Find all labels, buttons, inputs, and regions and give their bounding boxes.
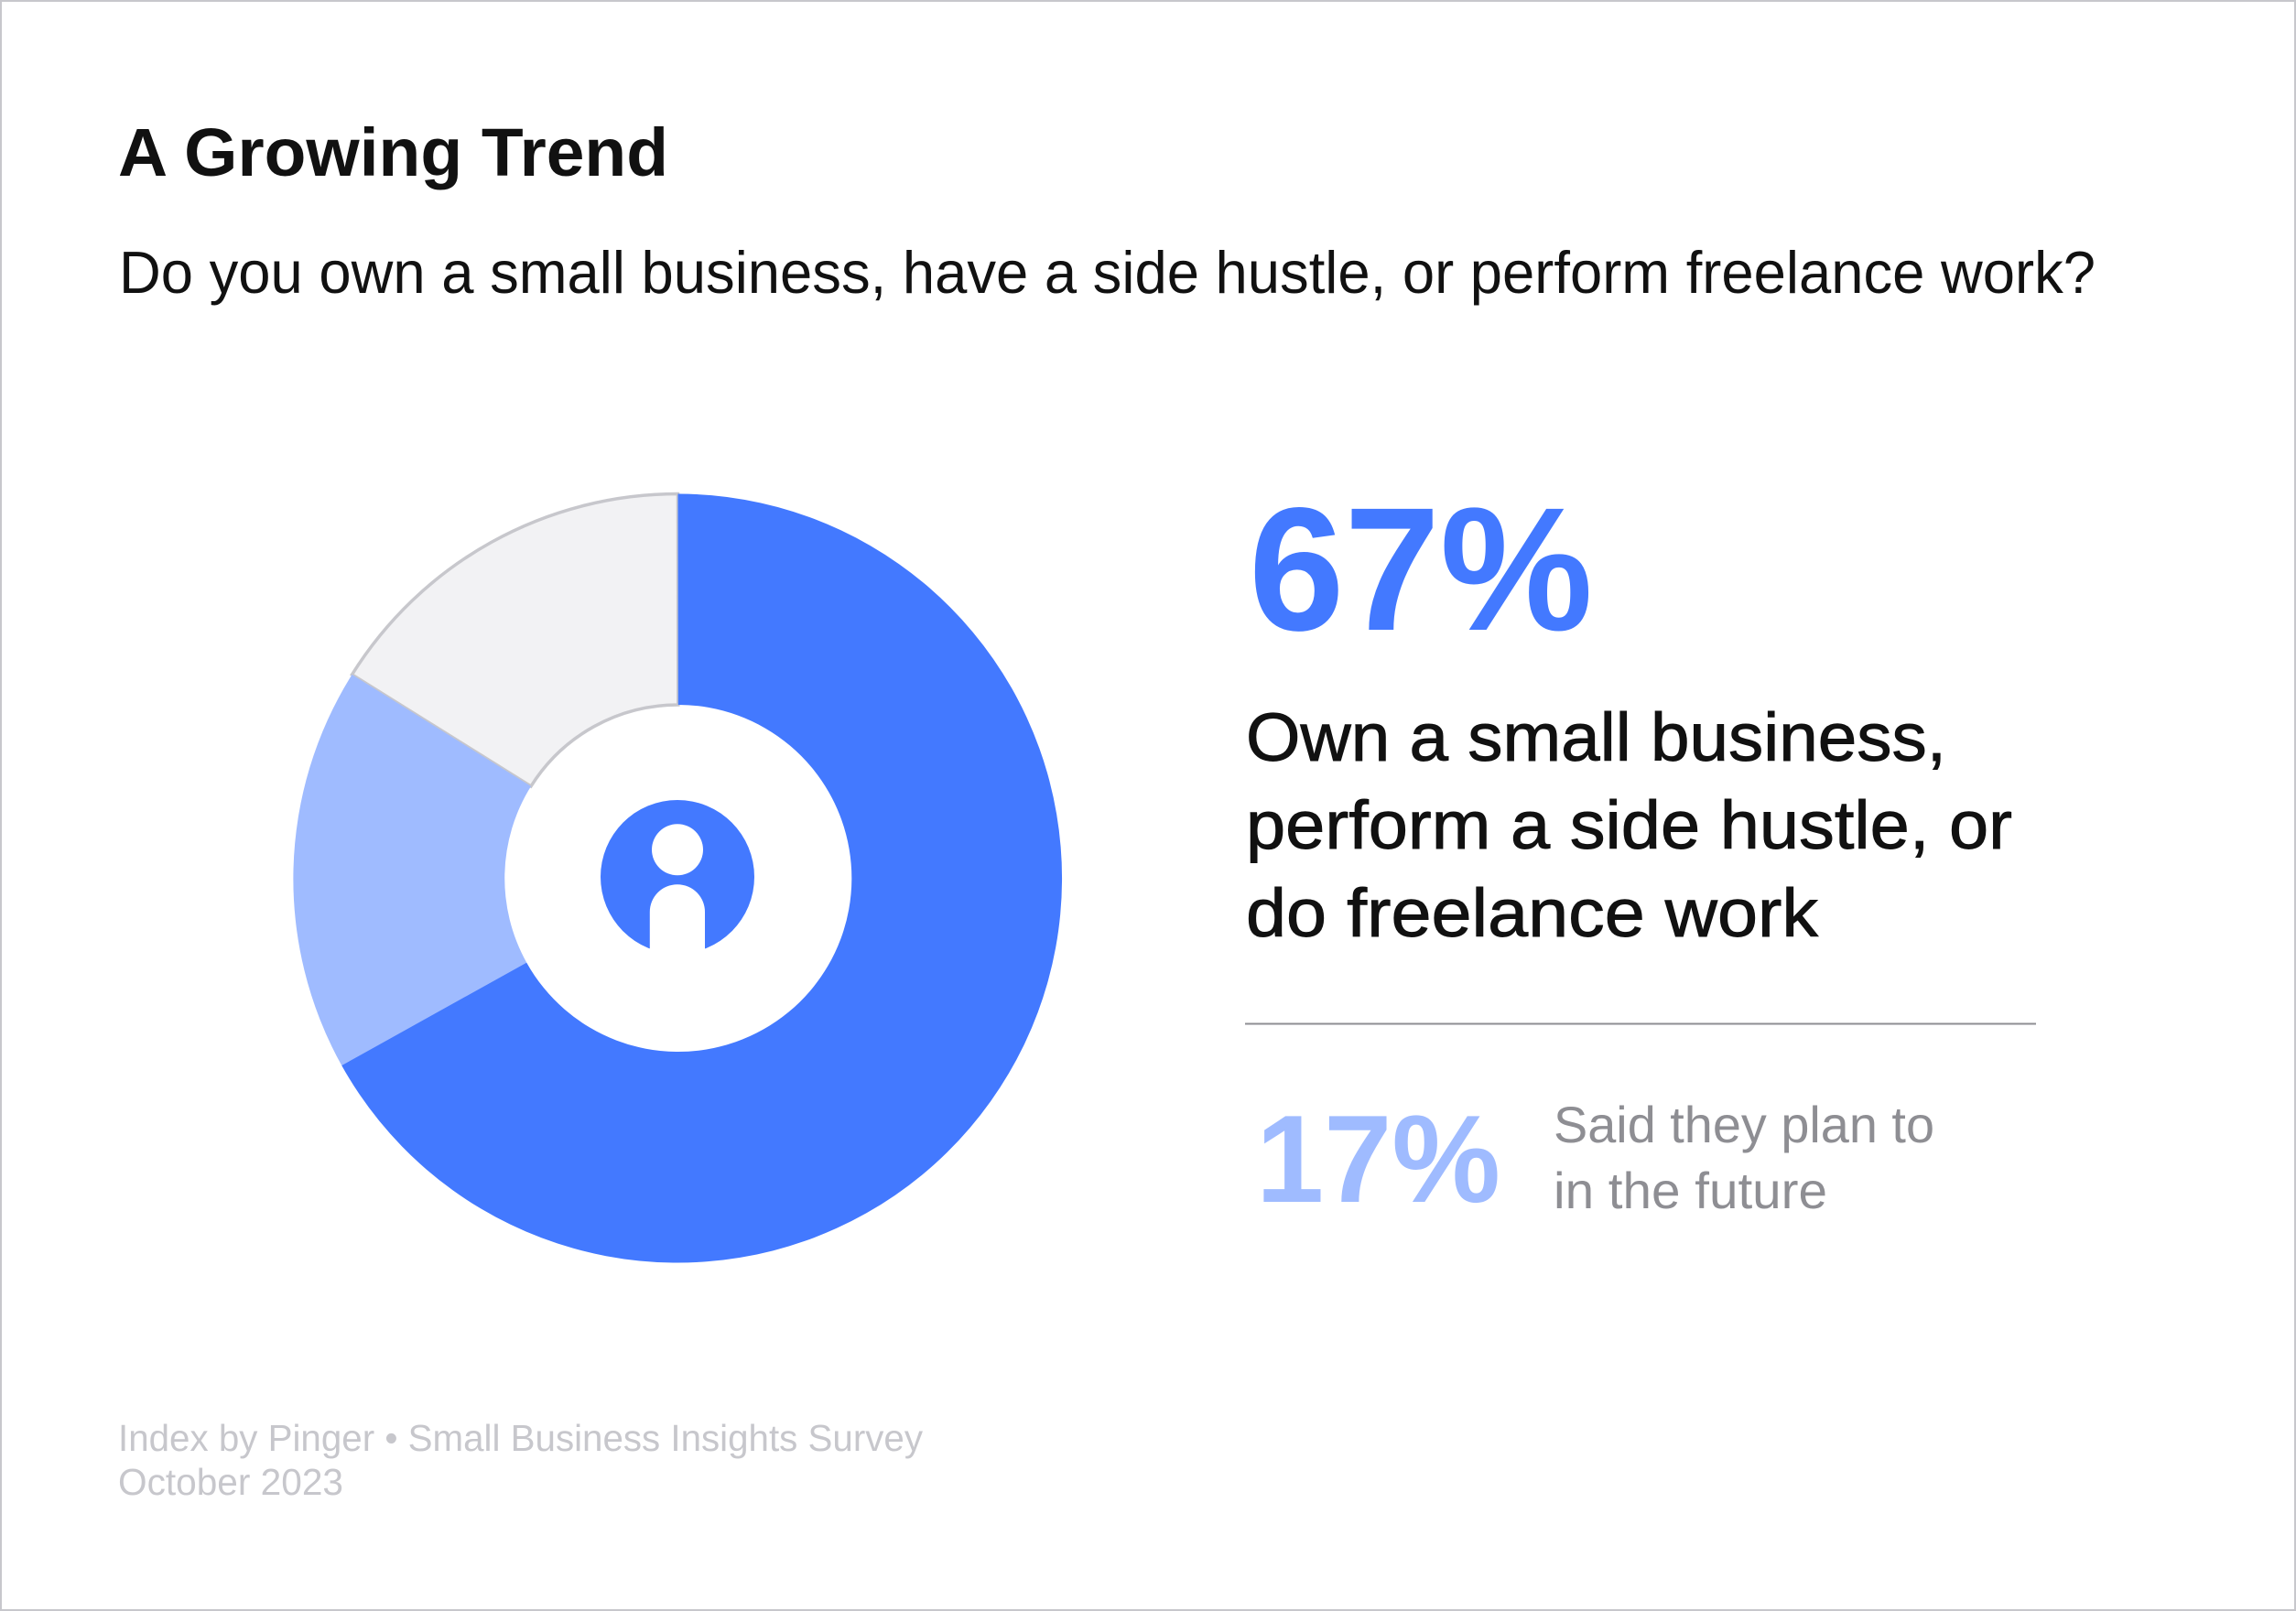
secondary stat 17%: 17% — [1256, 1089, 1500, 1228]
secondary stat description: in the future — [1554, 1162, 1827, 1219]
subtitle question: Do you own a small business, have a side hustle, or perform freelance work? — [119, 239, 2096, 306]
source footer: October 2023 — [118, 1461, 343, 1503]
stat description: Own a small business, — [1246, 699, 1946, 775]
slice: 17% plan to — [293, 675, 531, 1065]
big stat 67%: 67% — [1249, 470, 1593, 667]
source footer: Index by Pinger • Small Business Insights Survey — [118, 1417, 923, 1459]
slice: no / remaining share — [352, 494, 678, 786]
slice: 67% own — [341, 494, 1062, 1262]
source footer — [118, 1417, 923, 1503]
stat description — [1246, 699, 2012, 951]
secondary stat description — [1554, 1096, 1934, 1219]
donut chart — [293, 494, 1062, 1262]
stat description: do freelance work — [1246, 875, 1819, 951]
stat description: perform a side hustle, or — [1246, 787, 2012, 863]
title: A Growing Trend — [118, 114, 668, 190]
secondary stat description: Said they plan to — [1554, 1096, 1934, 1153]
icon: Index by Pinger logo — [601, 800, 754, 957]
